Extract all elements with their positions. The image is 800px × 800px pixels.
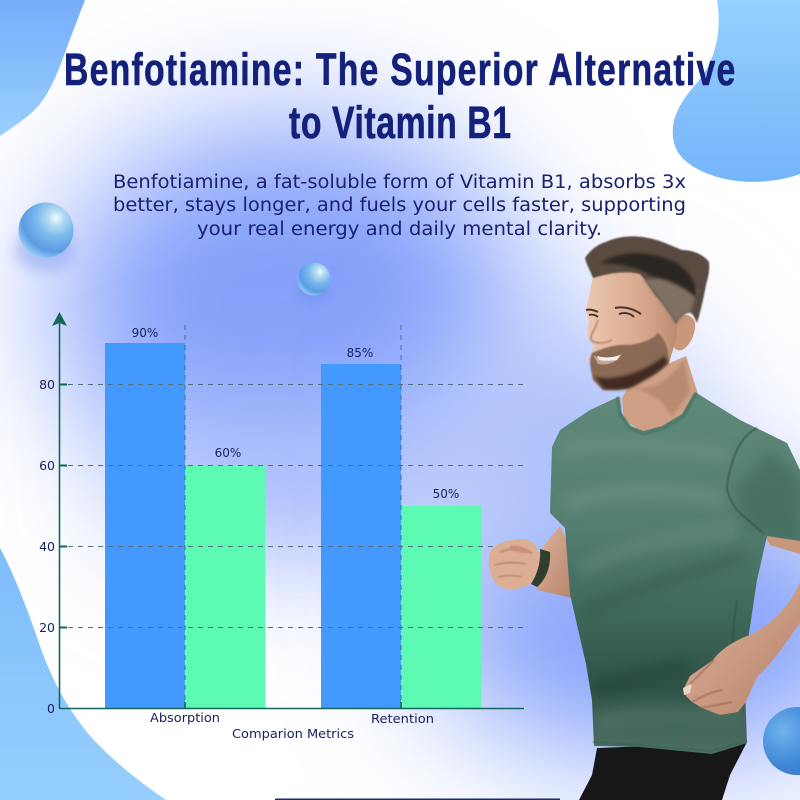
blob: bottom left xyxy=(0,548,166,800)
title: Benfotiamine: The Superior Alternative xyxy=(64,45,735,95)
bar: Absorption blue xyxy=(105,343,185,708)
value labels: 60% xyxy=(215,446,241,460)
x axis xyxy=(59,702,524,708)
blob: top left xyxy=(0,0,85,136)
category labels xyxy=(150,710,434,726)
intro paragraph: your real energy and daily mental clarity. xyxy=(197,219,602,240)
skin below right sleeve xyxy=(762,532,800,554)
icon: small sphere xyxy=(296,262,330,302)
beard xyxy=(590,333,669,390)
bottom edge line xyxy=(275,798,560,800)
hair xyxy=(585,236,709,324)
ear xyxy=(673,315,695,350)
y axis labels: 0 xyxy=(47,701,55,716)
pants xyxy=(579,742,747,800)
bar: Absorption green xyxy=(186,465,266,708)
value labels xyxy=(132,326,459,501)
y axis labels: 20 xyxy=(39,620,55,635)
nose shadow xyxy=(591,320,612,343)
intro paragraph xyxy=(113,172,686,240)
category labels: Absorption xyxy=(150,710,220,725)
face xyxy=(586,272,680,390)
y axis labels: 80 xyxy=(39,377,55,392)
photo: running man xyxy=(489,236,800,800)
icon: large sphere xyxy=(14,202,74,272)
eyes and brows xyxy=(586,307,641,317)
neck xyxy=(622,356,698,434)
y axis labels: 40 xyxy=(39,539,55,554)
intro paragraph: better, stays longer, and fuels your cells faster, supporting xyxy=(113,195,686,216)
smile xyxy=(593,354,622,365)
y axis labels xyxy=(39,377,55,716)
value labels: 85% xyxy=(347,346,373,360)
category labels: Retention xyxy=(371,711,434,726)
intro paragraph: Benfotiamine, a fat-soluble form of Vitamin B1, absorbs 3x xyxy=(113,172,686,193)
x axis title: Comparion Metrics xyxy=(232,726,354,741)
right arm and hand xyxy=(683,582,800,715)
y axis with arrow xyxy=(52,312,67,708)
value labels: 50% xyxy=(433,487,459,501)
shirt folds and shading xyxy=(560,444,800,724)
title: to Vitamin B1 xyxy=(289,98,511,148)
bar chart xyxy=(39,312,524,741)
blob: top right xyxy=(673,0,800,182)
bar: Retention blue xyxy=(321,364,401,708)
shirt xyxy=(550,392,800,754)
title xyxy=(64,45,735,148)
wristband xyxy=(531,549,550,587)
y axis labels: 60 xyxy=(39,458,55,473)
bar: Retention green xyxy=(402,506,482,708)
value labels: 90% xyxy=(132,326,158,340)
left arm and fist xyxy=(489,526,575,598)
icon: bottom right sphere xyxy=(763,707,800,775)
sleeve seam and collar xyxy=(727,428,763,533)
